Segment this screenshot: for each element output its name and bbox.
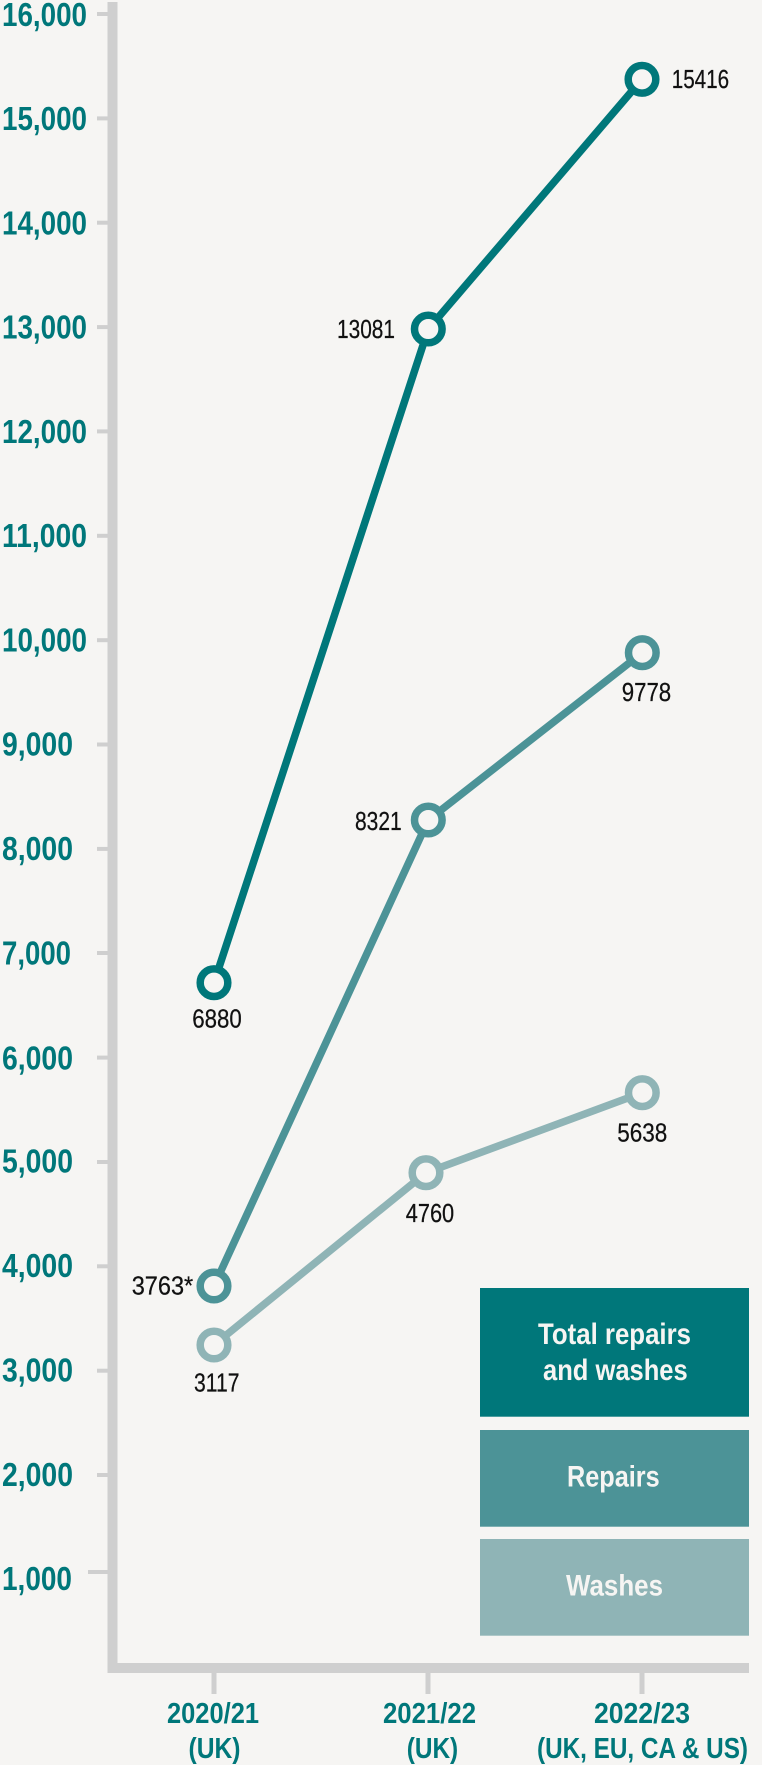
y-axis labels: 12,000 [2, 413, 87, 450]
x-axis labels: 2020/21 [167, 1698, 259, 1730]
legend: washes: Washes [566, 1570, 663, 1603]
series line: repairs [200, 639, 656, 1300]
data value labels: 5638 [617, 1118, 667, 1148]
data value labels: 3763* [132, 1270, 193, 1300]
y-axis labels [2, 0, 87, 1597]
legend: repairs: Repairs [567, 1461, 660, 1494]
y-axis labels: 9,000 [2, 726, 73, 763]
legend: total repairs and washes: and washes [543, 1354, 688, 1387]
data value labels: 9778 [622, 677, 671, 707]
data value labels: 15416 [672, 64, 729, 94]
x-axis labels: 2021/22 [383, 1698, 476, 1730]
y-axis labels: 11,000 [2, 517, 87, 554]
y-axis labels: 15,000 [2, 100, 87, 137]
data value labels: 13081 [337, 314, 395, 344]
y-axis labels: 14,000 [2, 204, 87, 242]
legend: repairs [480, 1430, 749, 1527]
y-axis labels: 1,000 [2, 1560, 72, 1597]
y-axis labels: 13,000 [2, 309, 87, 346]
y-axis labels: 4,000 [2, 1247, 73, 1284]
x-axis labels: (UK) [407, 1733, 458, 1765]
y-axis labels: 5,000 [2, 1143, 73, 1180]
data value labels: 6880 [192, 1003, 242, 1033]
y-axis labels: 3,000 [2, 1351, 73, 1388]
data value labels [132, 64, 729, 1398]
y-axis labels: 8,000 [2, 830, 73, 867]
y-axis labels: 2,000 [2, 1456, 73, 1493]
legend: washes [480, 1539, 749, 1636]
x-axis labels: (UK) [188, 1733, 240, 1765]
series line: washes [200, 1079, 656, 1359]
y-axis labels: 10,000 [2, 621, 87, 658]
y-axis labels: 7,000 [2, 935, 71, 972]
x-axis labels [167, 1698, 748, 1765]
legend: total repairs and washes: Total repairs [538, 1318, 691, 1351]
data value labels: 3117 [194, 1368, 240, 1398]
data value labels: 4760 [406, 1198, 454, 1228]
legend: total repairs and washes [480, 1288, 749, 1417]
y-axis labels: 6,000 [2, 1040, 73, 1077]
series line: total repairs and washes [200, 66, 656, 996]
x-axis labels: 2022/23 [594, 1698, 690, 1730]
data value labels: 8321 [355, 806, 402, 836]
